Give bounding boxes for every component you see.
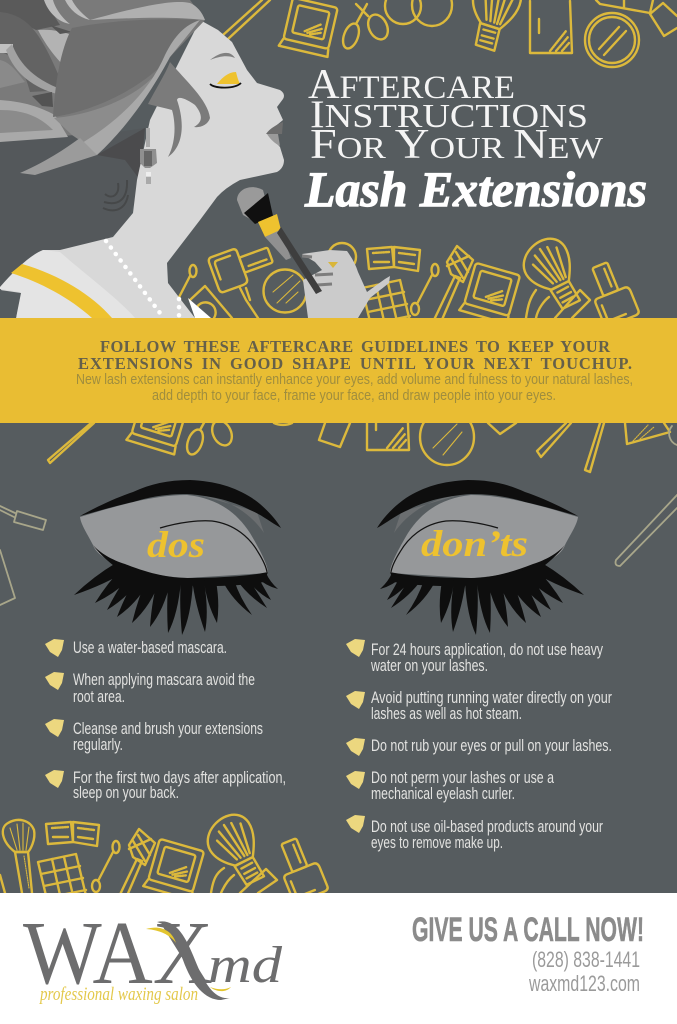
label: don'ts: don’ts xyxy=(421,524,528,565)
list: don'ts: lashes as well as hot steam. xyxy=(371,705,522,723)
neck curls xyxy=(103,180,128,210)
logo: WAXmd: WAX xyxy=(23,904,213,1003)
list: don'ts: water on your lashes. xyxy=(370,657,488,675)
band heading: FOLLOW THESE AFTERCARE GUIDELINES TO KEEP YOUR xyxy=(100,337,611,356)
illustration: woman applying makeup xyxy=(0,0,390,318)
band heading xyxy=(78,337,632,373)
list: don'ts xyxy=(346,639,612,852)
title: Lash Extensions xyxy=(304,161,647,217)
logo: WAXmd: md xyxy=(208,937,283,994)
crease xyxy=(160,521,267,572)
brow, eyeshadow, lash and lips xyxy=(210,53,235,60)
makeup icons: row below band xyxy=(48,392,677,472)
lash line xyxy=(93,545,268,586)
skin: face, neck and chest xyxy=(0,20,284,318)
band heading: EXTENSIONS IN GOOD SHAPE UNTIL YOUR NEXT TOUCHUP. xyxy=(78,354,632,373)
list: dos: sleep on your back. xyxy=(73,784,179,802)
dress with yellow stripe xyxy=(0,250,135,318)
list: don'ts: mechanical eyelash curler. xyxy=(371,785,515,803)
hair mass xyxy=(0,0,205,155)
list: don'ts: Do not use oil-based products around your xyxy=(371,818,603,836)
list: dos: Use a water-based mascara. xyxy=(73,639,227,657)
yellow band xyxy=(0,318,677,423)
list: don'ts: For 24 hours application, do not use heavy xyxy=(371,641,604,659)
eye: dos xyxy=(74,480,281,635)
lashes xyxy=(74,563,278,635)
list: dos: For the first two days after application, xyxy=(73,769,286,787)
list: dos xyxy=(45,639,286,802)
makeup icons: top row xyxy=(223,0,677,67)
pearl necklace xyxy=(106,241,163,317)
list: dos: Cleanse and brush your extensions xyxy=(73,720,263,738)
title: INSTRUCTIONS xyxy=(310,93,588,136)
hand xyxy=(302,250,390,318)
side lock of hair xyxy=(148,62,210,157)
list: dos: When applying mascara avoid the xyxy=(73,671,255,689)
band body text xyxy=(76,371,633,404)
makeup brush xyxy=(237,187,322,294)
list: don'ts: Do not perm your lashes or use a xyxy=(371,769,555,787)
list: dos: root area. xyxy=(73,688,125,706)
hair shadow behind neck xyxy=(0,128,145,287)
band body text: add depth to your face, frame your face, and draw people into your eyes. xyxy=(152,387,556,404)
title: FOR YOUR NEW xyxy=(310,122,604,168)
title: AFTERCARE xyxy=(308,62,515,108)
bullet icons xyxy=(346,639,365,833)
eyelid xyxy=(80,495,268,578)
makeup icons: row above band xyxy=(169,231,640,330)
eyebrow xyxy=(80,480,281,528)
call to action and contact details xyxy=(412,911,644,996)
list: don'ts: eyes to remove make up. xyxy=(371,834,503,852)
eye: don'ts xyxy=(377,480,584,635)
earring xyxy=(140,128,157,184)
label: dos: dos xyxy=(147,525,205,566)
title xyxy=(304,62,647,217)
makeup icons: bottom row xyxy=(0,807,329,905)
bullet icons xyxy=(45,639,64,788)
faded icons: left and right margins xyxy=(0,495,677,605)
list: dos: regularly. xyxy=(73,736,123,754)
footer panel xyxy=(0,893,677,1024)
logo: WAXmd: professional waxing salon xyxy=(38,984,198,1005)
